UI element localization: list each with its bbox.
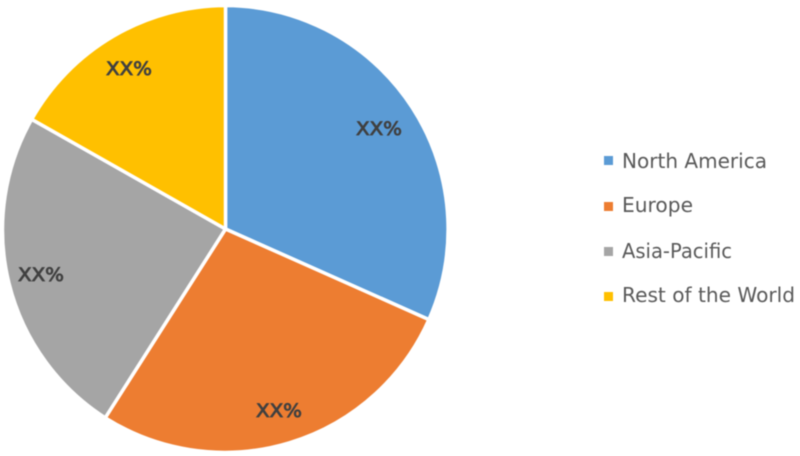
slice: North America (226, 6, 448, 320)
slice: Rest of the World (32, 6, 226, 229)
legend item: Asia-Pacific: Asia-Pacific (622, 239, 732, 263)
legend item: Rest of the World: Rest of the World (622, 283, 795, 307)
legend item: Europe: Europe (622, 193, 693, 217)
legend (604, 149, 795, 307)
label: Europe value: XX% (256, 400, 302, 422)
label: Asia-Pacific value: XX% (18, 264, 64, 286)
pie chart (2, 6, 448, 452)
label: Rest of the World value: XX% (106, 58, 152, 80)
value labels (18, 58, 402, 422)
slice: Europe (105, 229, 429, 452)
label: North America value: XX% (356, 118, 402, 140)
slice: Asia-Pacific (2, 119, 225, 418)
legend item: North America: North America (622, 149, 767, 173)
